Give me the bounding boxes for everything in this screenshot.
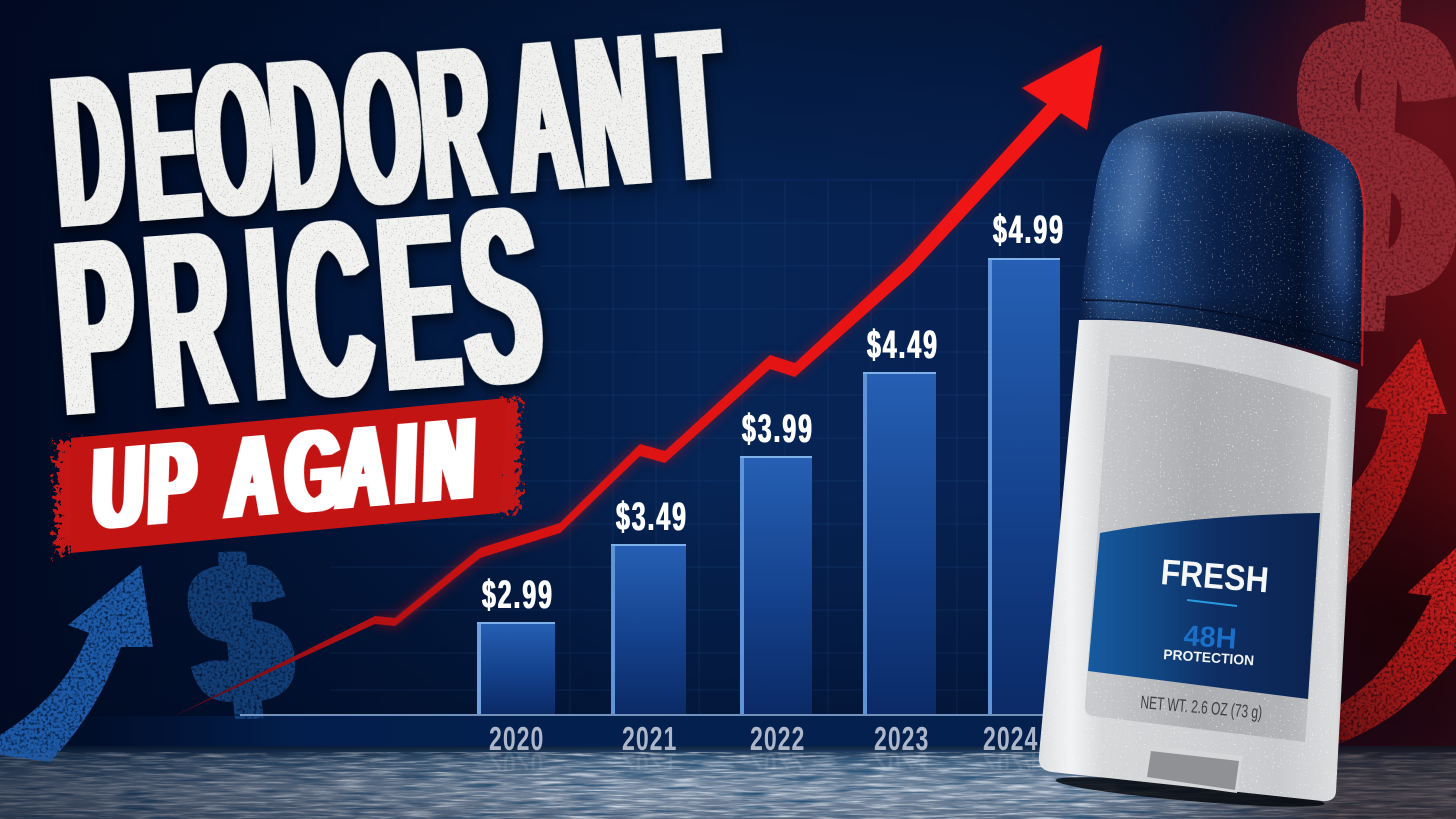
year labels: 2021 xyxy=(622,721,677,758)
price labels: $4.49 xyxy=(867,323,939,368)
label text FRESH: FRESH xyxy=(1159,551,1270,600)
year label reflections: 2024 xyxy=(983,745,1038,782)
axis line xyxy=(240,714,1065,716)
year label reflections: 2022 xyxy=(750,745,805,782)
year labels: 2024 xyxy=(983,721,1038,758)
year labels: 2020 xyxy=(489,721,544,758)
floor xyxy=(0,716,1456,819)
red rim glow xyxy=(1345,155,1365,366)
year labels xyxy=(489,721,1038,758)
year labels: 2022 xyxy=(750,721,805,758)
bar 2020 xyxy=(477,622,555,714)
label divider xyxy=(1187,600,1237,606)
year labels: 2023 xyxy=(874,721,929,758)
bar 2024 xyxy=(988,258,1060,714)
price labels: $2.99 xyxy=(482,573,554,618)
label text PROTECTION: PROTECTION xyxy=(1163,646,1255,668)
price labels: $4.99 xyxy=(993,208,1065,253)
icon: upper red arrow xyxy=(1340,338,1447,592)
bar chart: price by year xyxy=(477,258,1060,714)
price labels: $3.49 xyxy=(616,495,688,540)
icon: blue dollar sign: $ xyxy=(184,515,296,751)
rising red trend line with arrow xyxy=(170,45,1102,718)
title xyxy=(46,0,730,469)
red brush banner xyxy=(56,398,520,556)
title line: PRICES: PRICES xyxy=(49,155,549,469)
icon: blue rising arrow xyxy=(0,565,153,762)
bottom notch xyxy=(1142,745,1243,793)
icon: lower red arrow xyxy=(1335,535,1456,745)
net weight text: NET WT. 2.6 OZ (73 g) xyxy=(1140,692,1263,723)
bar 2022 xyxy=(740,456,812,714)
price labels: $3.99 xyxy=(742,407,814,452)
shadow under stick xyxy=(1055,771,1325,813)
price labels xyxy=(482,208,1065,618)
stick body xyxy=(1039,320,1360,801)
deodorant stick product xyxy=(1039,110,1365,813)
stick cap xyxy=(1080,110,1365,365)
year label reflections: 2021 xyxy=(622,745,677,782)
year label reflections xyxy=(490,752,1037,770)
clear window panel xyxy=(1085,355,1331,742)
subtitle: UP AGAIN: UP AGAIN xyxy=(87,394,480,554)
year label reflections: 2023 xyxy=(874,745,929,782)
bar 2021 xyxy=(611,544,686,714)
year label reflections: 2020 xyxy=(489,745,544,782)
label text 48H: 48H xyxy=(1183,620,1238,656)
navy product label xyxy=(1088,513,1320,699)
bar 2023 xyxy=(863,372,936,714)
